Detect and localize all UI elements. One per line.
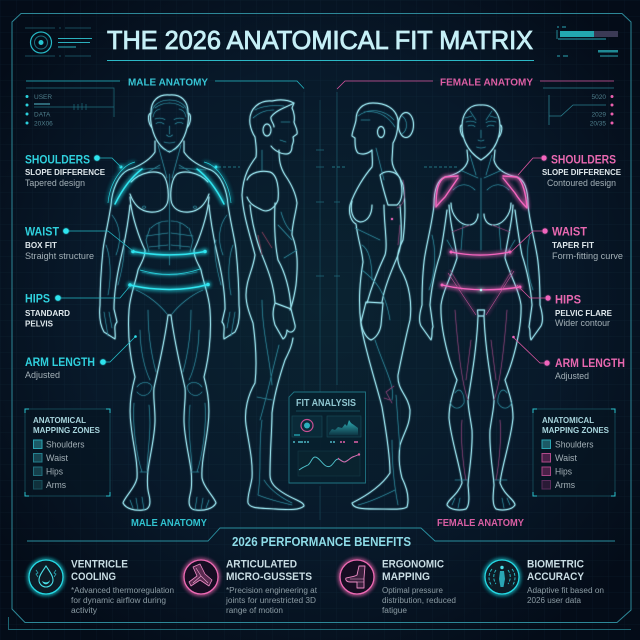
top-right tech widget [557,27,618,56]
callout: male shoulders [25,152,121,188]
female side figure [349,103,414,509]
benefit: articulated micro-gussets: joints for unrestricted 3D [225,596,316,605]
left data readout [26,88,114,128]
callout: male arm length: ARM LENGTH [25,355,95,369]
left data readout: 20X06 [34,120,53,128]
benefit: articulated micro-gussets: MICRO-GUSSETS [226,571,312,583]
line chart [298,451,360,476]
icon: gusset [184,560,218,594]
icon: biometric figure [485,560,519,594]
female section heading [337,76,614,89]
callout: male waist: Straight structure [25,251,94,261]
icon: water drop [29,560,63,594]
panel: male mapping zones legend: Waist [46,453,68,463]
panel: male mapping zones legend [25,409,110,496]
callout: female hips: HIPS [555,292,581,306]
right data readout [543,88,614,128]
callout: female waist: WAIST [552,224,588,238]
callout: female shoulders [518,152,621,188]
female front figure [420,105,542,510]
benefit: articulated micro-gussets: *Precision engineering at [226,586,318,595]
male section heading: MALE ANATOMY [128,76,208,88]
benefit: ergonomic mapping: fatigue [382,606,408,615]
panel: female mapping zones legend: Arms [555,480,575,490]
benefit: ventricle cooling: activity [71,606,97,615]
male anatomy caption: MALE ANATOMY [131,518,207,529]
benefit: ergonomic mapping [340,558,456,615]
panel: female mapping zones legend: Shoulders [555,440,594,450]
callout: male waist: WAIST [25,224,60,238]
panel: female mapping zones legend: Waist [555,453,577,463]
callout: female hips [517,285,612,328]
callout: female arm length: ARM LENGTH [555,356,625,370]
left data readout: USER [34,94,52,101]
callout: male hips: STANDARD [25,308,70,318]
male section heading [26,76,304,88]
area chart tile [327,416,361,437]
benefit: ergonomic mapping: Optimal pressure [382,586,444,595]
top-left tech widget [25,28,92,56]
callout: female hips: PELVIC FLARE [555,308,612,318]
benefit: ventricle cooling: for dynamic airflow during [71,596,166,605]
fit analysis heading: FIT ANALYSIS [296,398,356,409]
panel: female mapping zones legend [533,409,615,496]
right data readout: 20/35 [590,120,606,128]
panel: male mapping zones legend: Hips [46,466,63,476]
benefit: ergonomic mapping: distribution, reduced [382,596,456,605]
benefit: biometric accuracy: Adaptive fit based on [527,586,604,595]
callout: female waist: Form-fitting curve [552,251,623,261]
callout: female shoulders: SLOPE DIFFERENCE [542,167,621,177]
female anatomy caption: FEMALE ANATOMY [437,518,524,529]
male zone highlights [108,162,231,289]
panel: male mapping zones legend: Arms [46,480,66,490]
left data readout: DATA [34,112,51,118]
benefit: biometric accuracy: 2026 user data [527,596,582,605]
callout: male waist: BOX FIT [25,240,58,250]
benefit: ventricle cooling [29,558,174,615]
female zone highlights [436,176,527,315]
callout: male arm length: Adjusted [25,370,60,380]
benefit: ventricle cooling: COOLING [71,571,116,583]
callout: male shoulders: SLOPE DIFFERENCE [25,167,105,177]
centre measurement guides [218,92,458,520]
benefit: ventricle cooling: VENTRICLE [71,558,128,570]
right data readout: 2029 [592,112,606,118]
benefit: biometric accuracy [485,558,604,605]
callout: female waist: TAPER FIT [552,240,595,250]
female section heading: FEMALE ANATOMY [440,76,533,88]
callout: female hips: Wider contour [555,318,610,328]
callout: female shoulders: SHOULDERS [551,152,616,166]
panel: male mapping zones legend: ANATOMICAL [33,415,86,425]
panel: male mapping zones legend: Shoulders [46,440,85,450]
panel: fit analysis [289,392,366,483]
title: THE 2026 ANATOMICAL FIT MATRIX [107,25,533,55]
gauge tile [292,416,322,437]
callout: male shoulders: Tapered design [25,178,85,188]
panel: female mapping zones legend: Hips [555,466,572,476]
callout: male hips: HIPS [25,292,50,306]
panel: male mapping zones legend: MAPPING ZONES [33,425,100,435]
callout: female arm length: Adjusted [555,371,589,381]
callout: male hips [25,286,130,328]
callout: male waist [25,224,133,261]
benefits heading [27,528,615,549]
callout: male shoulders: SHOULDERS [25,152,90,166]
benefit: biometric accuracy: BIOMETRIC [527,558,584,570]
chart legend marks [293,441,335,443]
male side figure [242,100,304,510]
callout: male arm length [25,335,137,380]
benefit: biometric accuracy: ACCURACY [527,571,585,583]
icon: foot [340,560,374,594]
right data readout: 5020 [592,94,606,101]
benefit: articulated micro-gussets: range of motion [226,606,283,615]
benefit: ventricle cooling: *Advanced thermoregulation [71,586,174,595]
male front figure [100,95,239,510]
callout: female shoulders: Contoured design [547,178,616,188]
benefit: ergonomic mapping: ERGONOMIC [382,558,444,570]
benefit: articulated micro-gussets [184,558,318,615]
panel: female mapping zones legend: MAPPING ZONES [542,425,609,435]
callout: male hips: PELVIS [25,318,53,328]
benefits heading: 2026 PERFORMANCE BENEFITS [232,535,411,549]
callout: female waist [510,224,623,261]
panel: female mapping zones legend: ANATOMICAL [542,415,594,425]
benefit: ergonomic mapping: MAPPING [382,571,430,583]
callout: female arm length [512,336,625,381]
benefit: articulated micro-gussets: ARTICULATED [226,558,297,570]
